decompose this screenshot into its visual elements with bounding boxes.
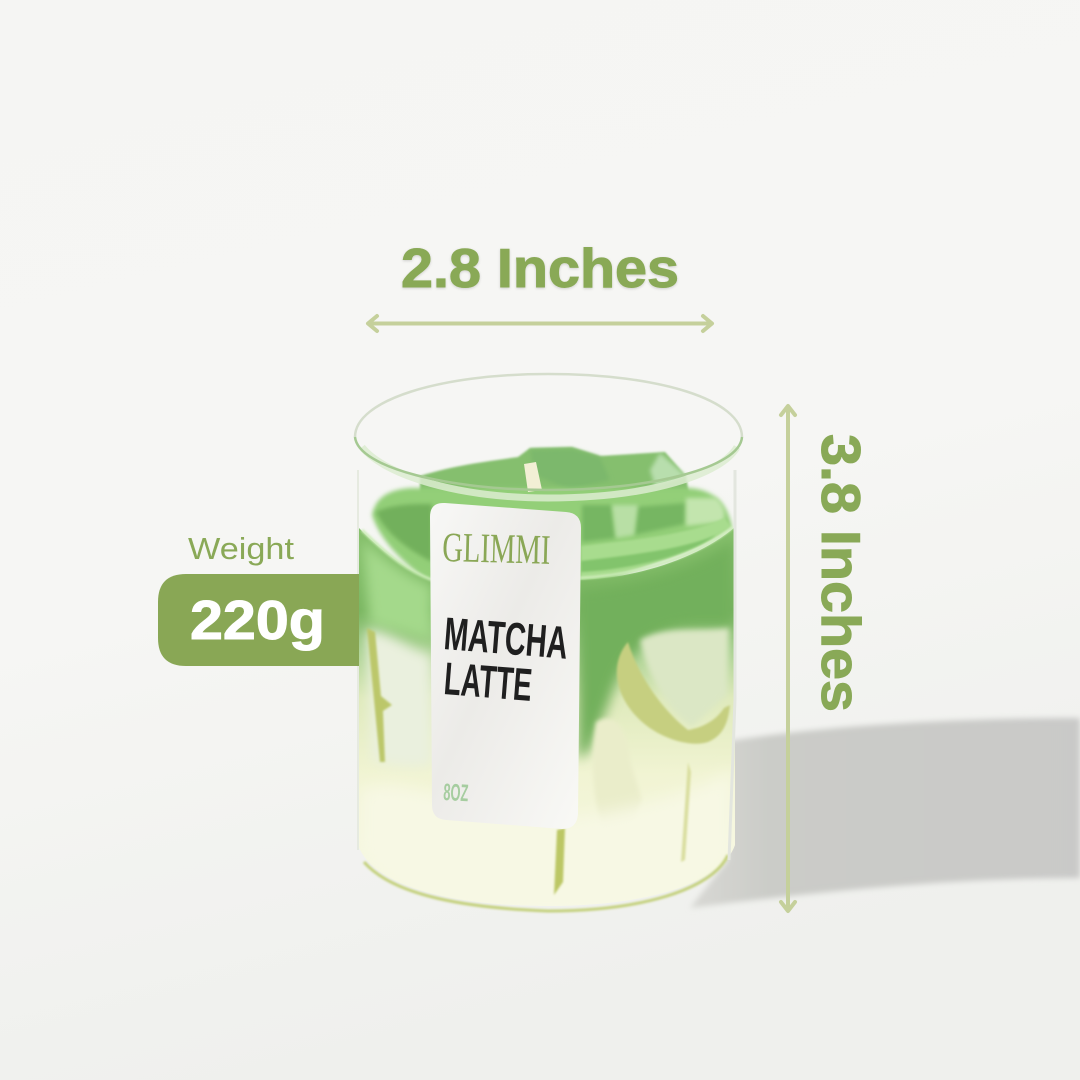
right band deep	[578, 540, 733, 760]
label product name: LATTE	[442, 652, 534, 711]
cast shadow	[690, 718, 1080, 908]
height heading: 3.8 Inches	[810, 434, 872, 712]
glass base	[364, 855, 728, 911]
lower ice chunk	[591, 716, 639, 812]
width heading: 2.8 Inches	[401, 237, 679, 299]
badge shape	[158, 574, 359, 666]
light wax between cubes	[612, 505, 638, 538]
left band light	[362, 540, 432, 640]
left wax hollow	[376, 504, 432, 562]
lower wax gradient	[359, 528, 735, 858]
wax melted chunk facet	[530, 449, 610, 490]
glass right wall	[729, 470, 735, 860]
glass front rim	[355, 437, 742, 490]
cream wax base	[362, 777, 730, 851]
infographic canvas	[158, 247, 1080, 914]
badge value: 220g	[190, 589, 325, 651]
wick	[524, 462, 542, 492]
wax cracks	[554, 828, 565, 895]
wax back surface	[420, 447, 690, 500]
left ice edge	[367, 628, 392, 762]
right wax cubes	[582, 503, 686, 542]
glass left wall	[357, 470, 359, 850]
right ice cube	[640, 628, 729, 727]
wax chunk highlight	[650, 453, 686, 486]
weight badge	[158, 574, 359, 666]
glass back rim	[355, 374, 742, 437]
ice cube yellow edge	[617, 642, 730, 744]
left ice cube	[366, 630, 432, 767]
label product name: MATCHA	[442, 607, 570, 669]
wax ridge	[581, 518, 732, 578]
wax shoulder	[372, 488, 732, 585]
label brand: GLIMMI	[442, 525, 551, 574]
height arrow	[781, 406, 795, 911]
wax body	[358, 488, 735, 906]
weight caption: Weight	[188, 531, 294, 566]
glass front rim inner	[362, 447, 737, 498]
wax ridge shade	[581, 535, 716, 572]
label product name	[442, 607, 570, 711]
label size: 8OZ	[443, 779, 469, 807]
wax rim highlight	[362, 527, 733, 580]
product label	[430, 503, 581, 829]
light wax right corner	[686, 498, 724, 526]
width arrow	[368, 316, 712, 331]
label card	[430, 503, 581, 829]
candle jar	[355, 374, 742, 911]
